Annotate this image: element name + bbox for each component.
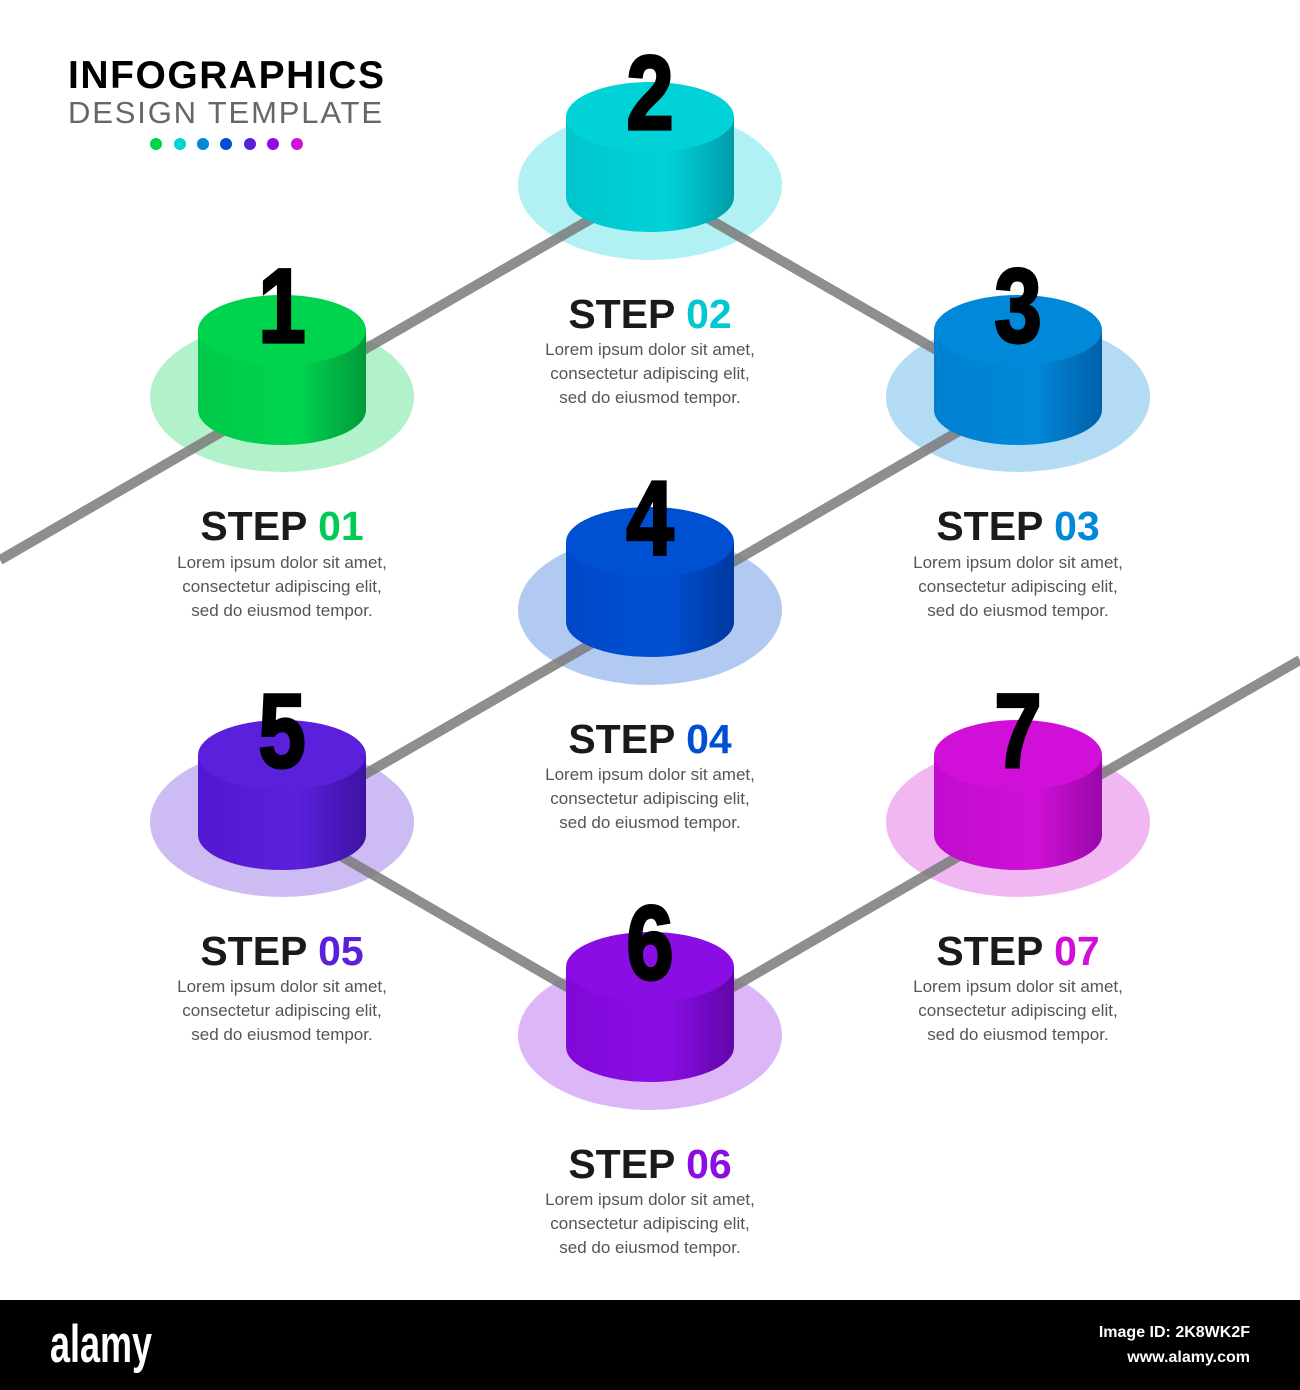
connecting line	[0, 185, 1300, 1035]
step 06 text	[545, 1141, 755, 1257]
step 02 text: consectetur adipiscing elit,	[550, 364, 750, 383]
cylinder 2	[566, 36, 734, 232]
step 03 text: sed do eiusmod tempor.	[927, 601, 1109, 620]
step 02 text: Lorem ipsum dolor sit amet,	[545, 340, 755, 359]
step 03 text: Lorem ipsum dolor sit amet,	[913, 553, 1123, 572]
cylinder 4: 4	[626, 461, 674, 577]
step 01 text: Lorem ipsum dolor sit amet,	[177, 553, 387, 572]
title	[68, 54, 384, 150]
step 06 text: STEP 06	[568, 1141, 732, 1187]
step 04 text: STEP 04	[568, 716, 732, 762]
step 07 text: STEP 07	[936, 928, 1100, 974]
step 05 text: Lorem ipsum dolor sit amet,	[177, 977, 387, 996]
step 03 text: consectetur adipiscing elit,	[918, 577, 1118, 596]
step 01 text: STEP 01	[200, 503, 364, 549]
step 03 text: STEP 03	[936, 503, 1100, 549]
step 02 text: STEP 02	[568, 291, 732, 337]
footer bar	[0, 1300, 1300, 1390]
step 07 text: sed do eiusmod tempor.	[927, 1025, 1109, 1044]
step 06 text: sed do eiusmod tempor.	[559, 1238, 741, 1257]
step 04 text: consectetur adipiscing elit,	[550, 789, 750, 808]
step 06 text: consectetur adipiscing elit,	[550, 1214, 750, 1233]
step 07 text: consectetur adipiscing elit,	[918, 1001, 1118, 1020]
step 01 text: sed do eiusmod tempor.	[191, 601, 373, 620]
step 02 text	[545, 291, 755, 407]
cylinder 7	[934, 674, 1102, 870]
cylinder 4	[566, 461, 734, 657]
step 05 text: sed do eiusmod tempor.	[191, 1025, 373, 1044]
step 07 text	[913, 928, 1123, 1044]
title: DESIGN TEMPLATE	[68, 95, 384, 130]
cylinder 6: 6	[626, 886, 674, 1002]
step 03 text	[913, 503, 1123, 620]
step 02 text: sed do eiusmod tempor.	[559, 388, 741, 407]
cylinder 3	[934, 249, 1102, 445]
cylinder 5: 5	[258, 674, 306, 790]
step 05 text	[177, 928, 387, 1044]
step 04 text: Lorem ipsum dolor sit amet,	[545, 765, 755, 784]
cylinder 6	[566, 886, 734, 1082]
step 07 text: Lorem ipsum dolor sit amet,	[913, 977, 1123, 996]
step 01 text: consectetur adipiscing elit,	[182, 577, 382, 596]
footer bar: alamy	[50, 1314, 152, 1374]
cylinder 1: 1	[258, 249, 306, 365]
step 04 text: sed do eiusmod tempor.	[559, 813, 741, 832]
footer bar: Image ID: 2K8WK2F	[1099, 1324, 1250, 1341]
cylinder 1	[198, 249, 366, 445]
cylinder 3: 3	[994, 249, 1042, 365]
cylinder 5	[198, 674, 366, 870]
cylinder 7: 7	[994, 674, 1042, 790]
halos	[150, 110, 1150, 1110]
title: INFOGRAPHICS	[68, 54, 384, 97]
step 06 text: Lorem ipsum dolor sit amet,	[545, 1190, 755, 1209]
step 04 text	[545, 716, 755, 832]
step 05 text: consectetur adipiscing elit,	[182, 1001, 382, 1020]
footer bar: www.alamy.com	[1126, 1349, 1250, 1366]
cylinder 2: 2	[626, 36, 674, 152]
step 05 text: STEP 05	[200, 928, 364, 974]
step 01 text	[177, 503, 387, 620]
